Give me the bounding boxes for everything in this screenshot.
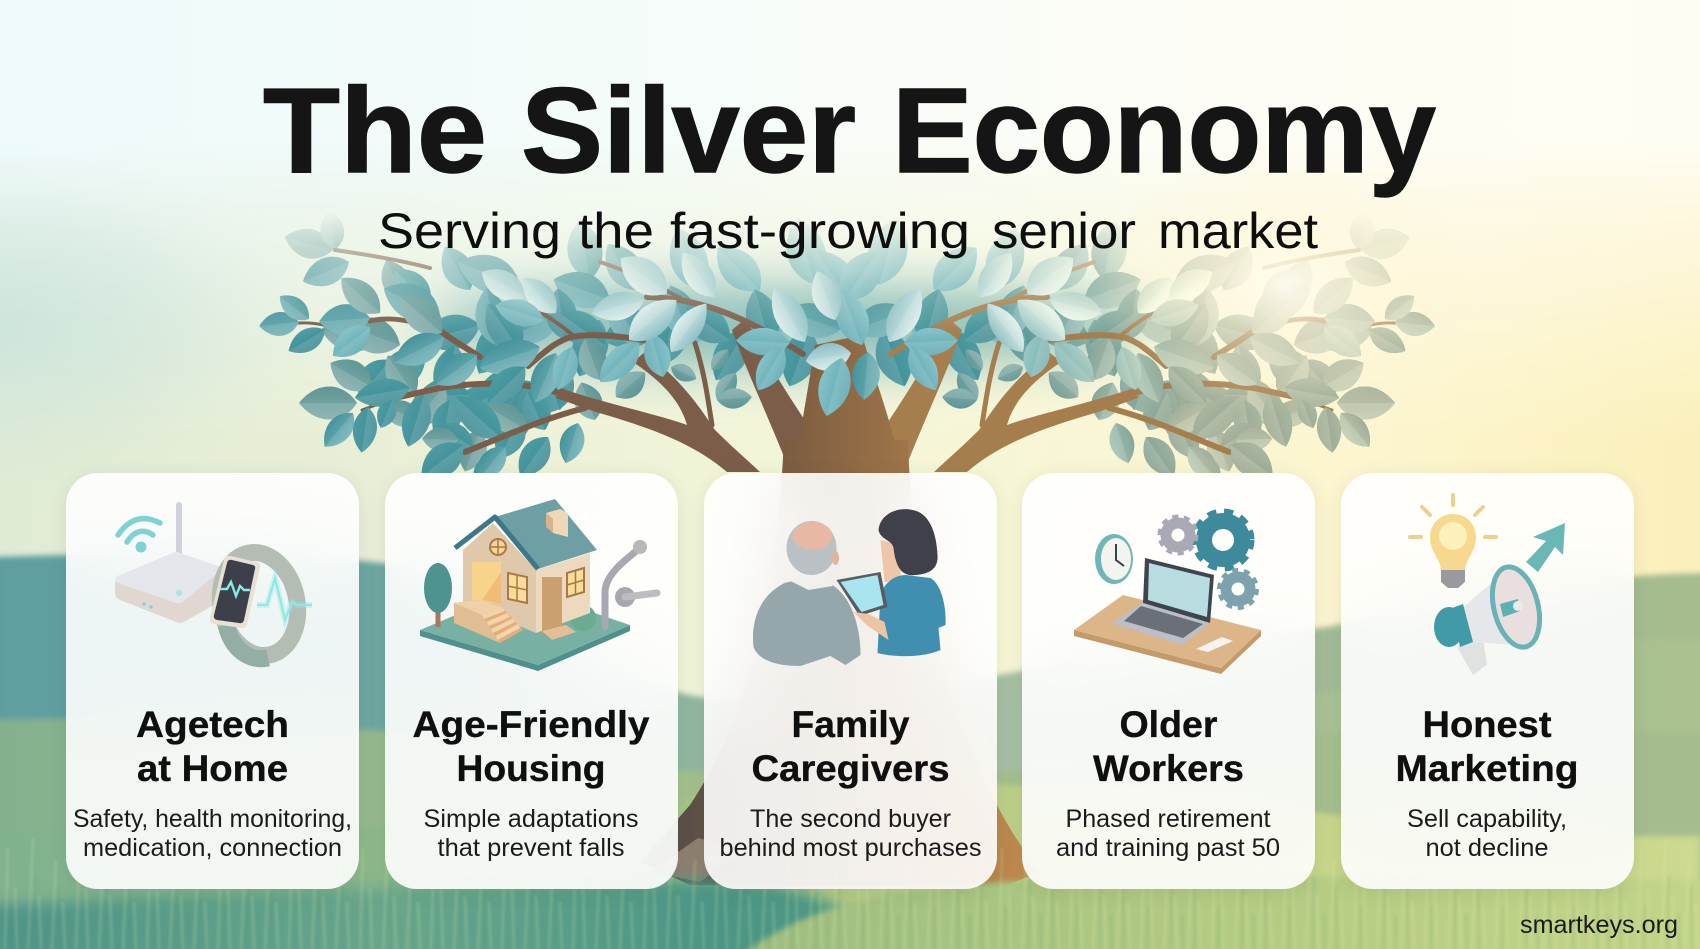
description: medication, connection (83, 834, 342, 862)
heading: Marketing (1396, 748, 1578, 789)
source credit: smartkeys.org (1520, 911, 1678, 939)
heading: Housing (456, 748, 606, 789)
description: that prevent falls (438, 834, 624, 862)
panel: Agetech at Home (66, 473, 359, 889)
sky (0, 0, 1700, 699)
distant hills (0, 554, 1700, 949)
description: not decline (1426, 834, 1548, 862)
tree (258, 209, 1436, 888)
panel: Family Caregivers (704, 473, 996, 889)
panel: Honest Marketing (1341, 473, 1634, 889)
panel: Age-Friendly Housing (385, 473, 678, 889)
description (719, 805, 981, 862)
icon: light bulb, arrow and megaphone (1410, 495, 1565, 675)
description: Sell capability, (1407, 805, 1567, 833)
heading: Honest (1422, 704, 1552, 745)
heading: Older (1120, 704, 1218, 745)
subtitle: senior (992, 203, 1136, 259)
icon: laptop, clock and gears (1074, 512, 1261, 674)
sun glow (1095, 155, 1475, 415)
title: Silver (521, 62, 856, 198)
subtitle: Serving (378, 203, 561, 259)
panel: Older Workers (1022, 473, 1315, 889)
icon: house with grab bar (420, 499, 657, 671)
heading (136, 704, 289, 789)
front foliage (258, 245, 1436, 489)
description: behind most purchases (719, 834, 981, 862)
subtitle: the (578, 203, 654, 259)
centre leaves (806, 271, 880, 416)
heading: at Home (137, 748, 288, 789)
description (1056, 805, 1280, 862)
description: The second buyer (750, 805, 950, 833)
icon: senior and caregiver with tablet (752, 509, 945, 666)
description (1407, 805, 1567, 862)
canopy haze (430, 276, 1150, 368)
trunk and roots (672, 338, 1028, 889)
heading: Caregivers (751, 748, 949, 789)
title: The (263, 62, 487, 198)
description: Safety, health monitoring, (73, 805, 352, 833)
back foliage (281, 209, 1413, 476)
subtitle: market (1158, 203, 1318, 259)
heading: Family (791, 704, 909, 745)
description: and training past 50 (1056, 834, 1280, 862)
subtitle (378, 203, 1318, 259)
description (73, 805, 352, 862)
title: Economy (892, 62, 1436, 198)
meadow (0, 784, 1700, 949)
branches (299, 250, 1395, 472)
subtitle: fast-growing (670, 203, 970, 259)
description (424, 805, 638, 862)
heading (412, 704, 650, 789)
heading (751, 704, 949, 789)
heading: Age-Friendly (412, 704, 650, 745)
heading (1093, 704, 1244, 789)
icon: router and smartwatch (115, 505, 312, 663)
heading: Agetech (136, 704, 289, 745)
heading (1396, 704, 1578, 789)
heading: Workers (1093, 748, 1244, 789)
description: Simple adaptations (424, 805, 638, 833)
description: Phased retirement (1066, 805, 1271, 833)
foreground grass (0, 826, 1700, 949)
title (263, 62, 1436, 259)
